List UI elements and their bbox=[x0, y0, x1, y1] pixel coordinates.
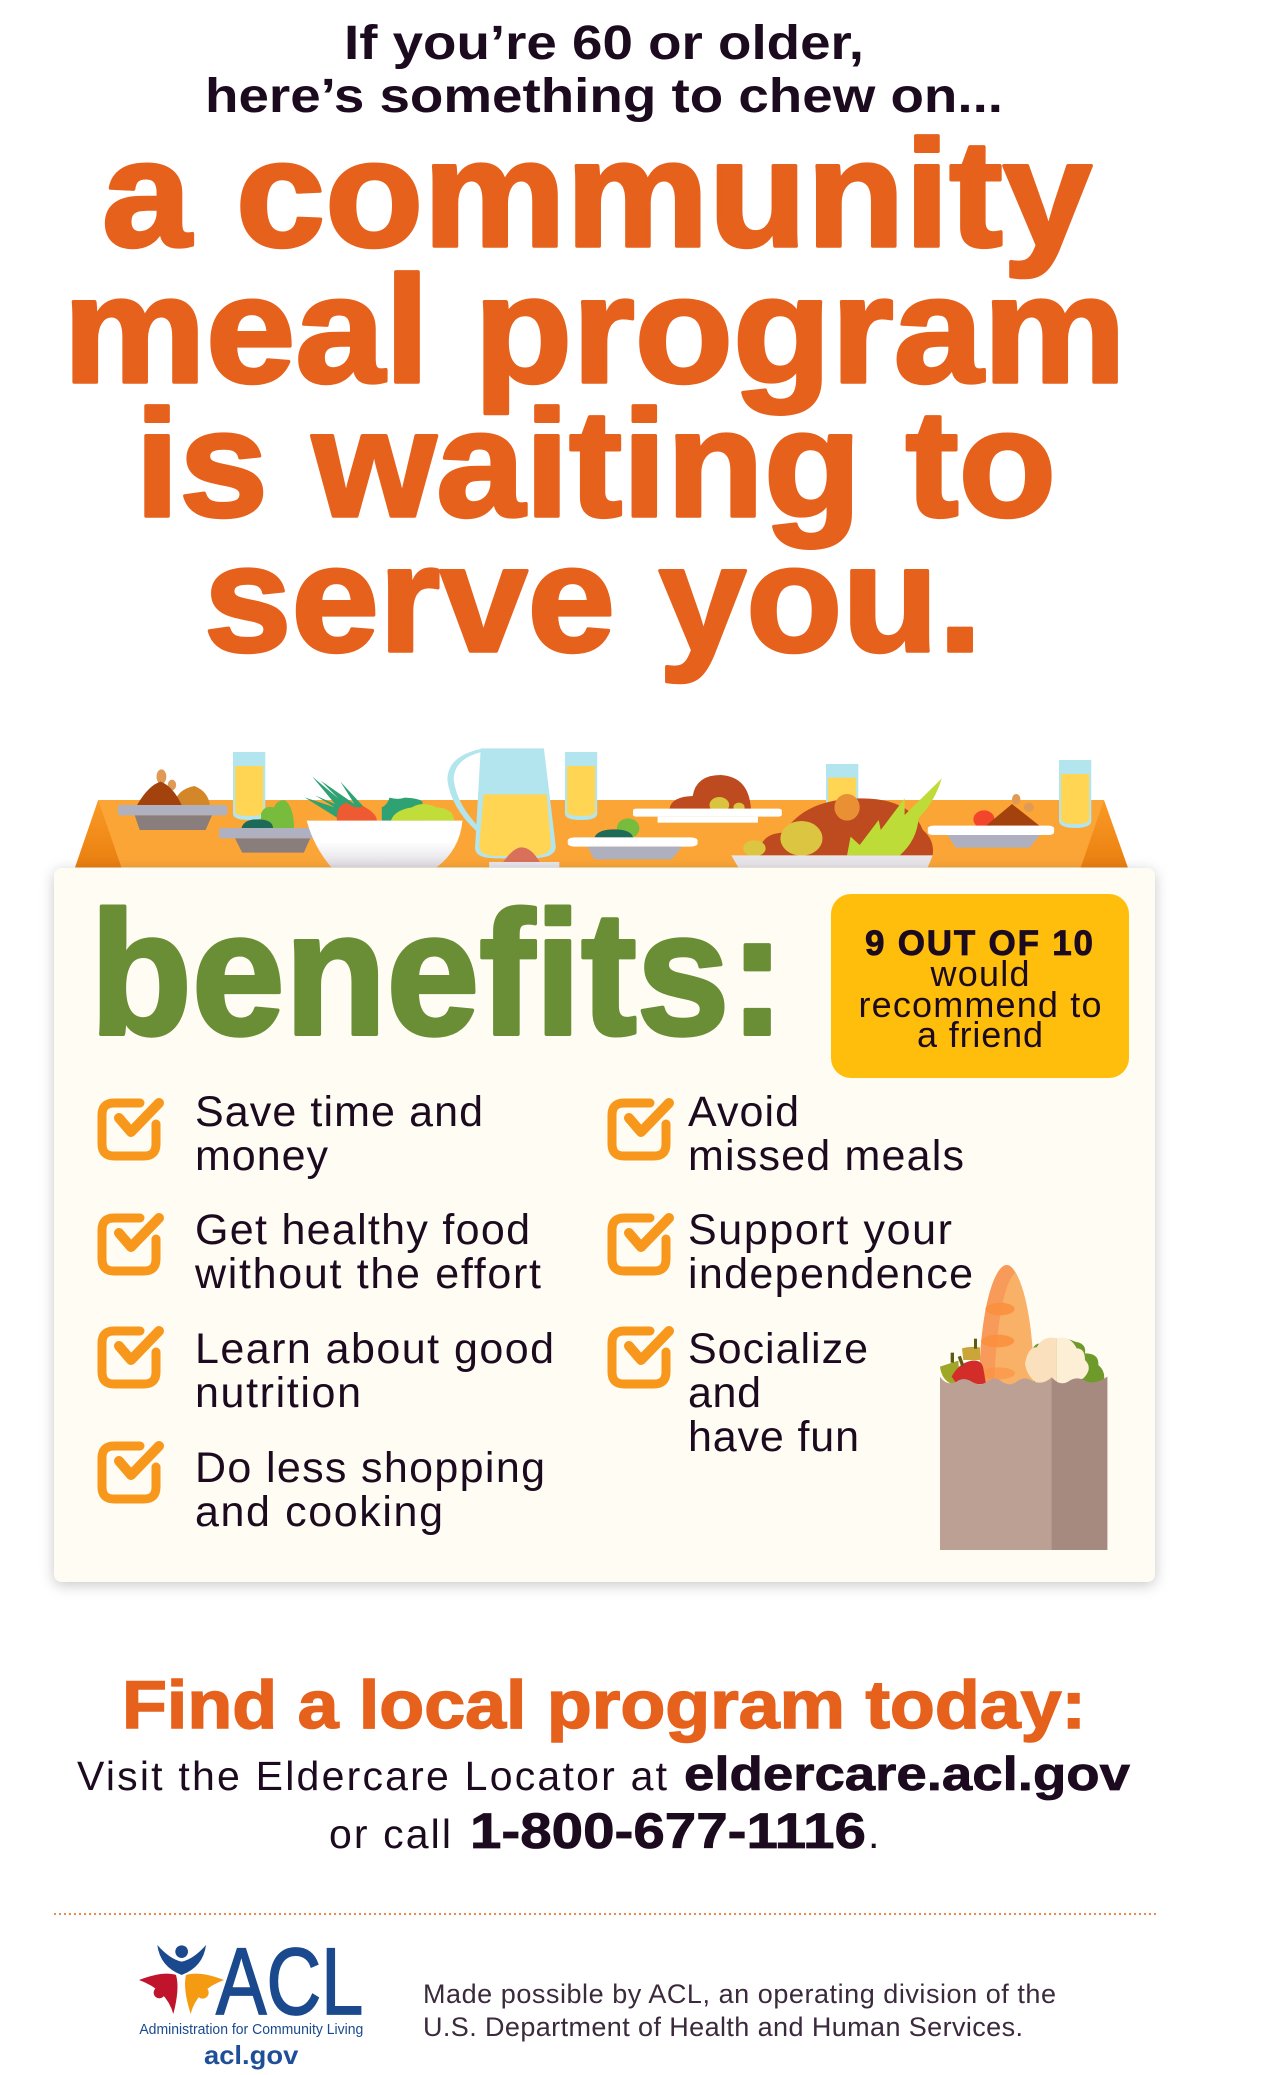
benefit: save time and money: money bbox=[195, 1132, 328, 1180]
intro heading: If you’re 60 or older, bbox=[344, 17, 864, 70]
call to action: phone: . bbox=[868, 1811, 879, 1857]
glass of juice 1 bbox=[233, 752, 265, 820]
benefit: avoid missed meals bbox=[612, 1088, 964, 1180]
callout: 9 out of 10: a friend bbox=[917, 1014, 1043, 1055]
main title: meal program bbox=[63, 245, 1126, 415]
benefit: good nutrition: nutrition bbox=[195, 1369, 361, 1417]
panel: benefits bbox=[54, 868, 1155, 1582]
heading: benefits: benefits: bbox=[90, 876, 785, 1072]
benefit: good nutrition: Learn about good bbox=[195, 1325, 554, 1373]
benefit: healthy food bbox=[102, 1206, 541, 1298]
benefit: socialize bbox=[612, 1325, 868, 1461]
benefit: socialize: have fun bbox=[688, 1413, 859, 1461]
table bbox=[75, 800, 1128, 867]
benefit: less shopping bbox=[102, 1444, 545, 1536]
call to action: website: Visit the Eldercare Locator at bbox=[77, 1753, 668, 1799]
intro heading: here’s something to chew on... bbox=[205, 70, 1003, 123]
footer credit: Made possible by ACL, an operating division of the bbox=[423, 1979, 1056, 2009]
benefit: support independence: independence bbox=[688, 1250, 973, 1298]
logo emblem bbox=[139, 1945, 224, 2014]
main title: a community bbox=[102, 109, 1092, 279]
callout: 9 out of 10 bbox=[831, 894, 1129, 1078]
icon: grocery bag bbox=[940, 1265, 1107, 1550]
call to action: phone: or call bbox=[329, 1811, 451, 1857]
call to action: website: eldercare.acl.gov bbox=[684, 1747, 1130, 1800]
callout: 9 out of 10: recommend to bbox=[858, 984, 1102, 1025]
panel background bbox=[54, 868, 1155, 1582]
footer credit bbox=[423, 1979, 1056, 2042]
plate of chicken bbox=[118, 769, 227, 830]
call to action: phone: 1-800-677-1116 bbox=[470, 1803, 866, 1859]
logo: ACL bbox=[139, 1929, 363, 2070]
logo wordmark: ACL bbox=[216, 1929, 363, 2035]
main title: is waiting to bbox=[135, 379, 1056, 549]
logo wordmark bbox=[139, 1929, 363, 2070]
call to action: phone bbox=[329, 1803, 879, 1859]
benefit: socialize: and bbox=[688, 1369, 761, 1417]
benefit: healthy food: Get healthy food bbox=[195, 1206, 530, 1254]
main title bbox=[63, 109, 1126, 684]
main title: serve you. bbox=[204, 514, 982, 684]
glass of juice 3 bbox=[826, 764, 858, 817]
plate with drumstick bbox=[928, 794, 1054, 848]
glass of juice 4 bbox=[1059, 760, 1091, 828]
salad bowl bbox=[305, 777, 462, 867]
turkey platter bbox=[731, 778, 942, 867]
benefit: healthy food: without the effort bbox=[194, 1250, 541, 1298]
call to action heading: Find a local program today: bbox=[122, 1667, 1086, 1743]
logo wordmark: Administration for Community Living bbox=[139, 2022, 363, 2038]
benefit: avoid missed meals: Avoid bbox=[688, 1088, 799, 1136]
juice pitcher bbox=[451, 748, 559, 868]
call to action: website bbox=[77, 1747, 1130, 1800]
benefit: save time and money bbox=[102, 1088, 483, 1180]
illustration: buffet table with food bbox=[75, 748, 1128, 868]
callout: 9 out of 10: 9 OUT OF 10 bbox=[865, 924, 1093, 963]
benefit: avoid missed meals: missed meals bbox=[688, 1132, 964, 1180]
benefit: support independence bbox=[612, 1206, 973, 1298]
benefit: less shopping: and cooking bbox=[195, 1488, 443, 1536]
callout: 9 out of 10: would bbox=[930, 953, 1030, 994]
benefit: good nutrition bbox=[102, 1325, 554, 1417]
benefit: save time and money: Save time and bbox=[195, 1088, 483, 1136]
footer credit: U.S. Department of Health and Human Services. bbox=[423, 2012, 1023, 2042]
benefit: support independence: Support your bbox=[688, 1206, 952, 1254]
glass of juice 2 bbox=[565, 752, 597, 820]
benefit: less shopping: Do less shopping bbox=[195, 1444, 545, 1492]
roast on white plate bbox=[633, 775, 782, 823]
logo wordmark: acl.gov bbox=[204, 2040, 299, 2070]
intro heading bbox=[205, 17, 1003, 123]
small vegetable dish bbox=[568, 818, 698, 859]
benefit: socialize: Socialize bbox=[688, 1325, 868, 1373]
plate of vegetables bbox=[219, 800, 314, 853]
